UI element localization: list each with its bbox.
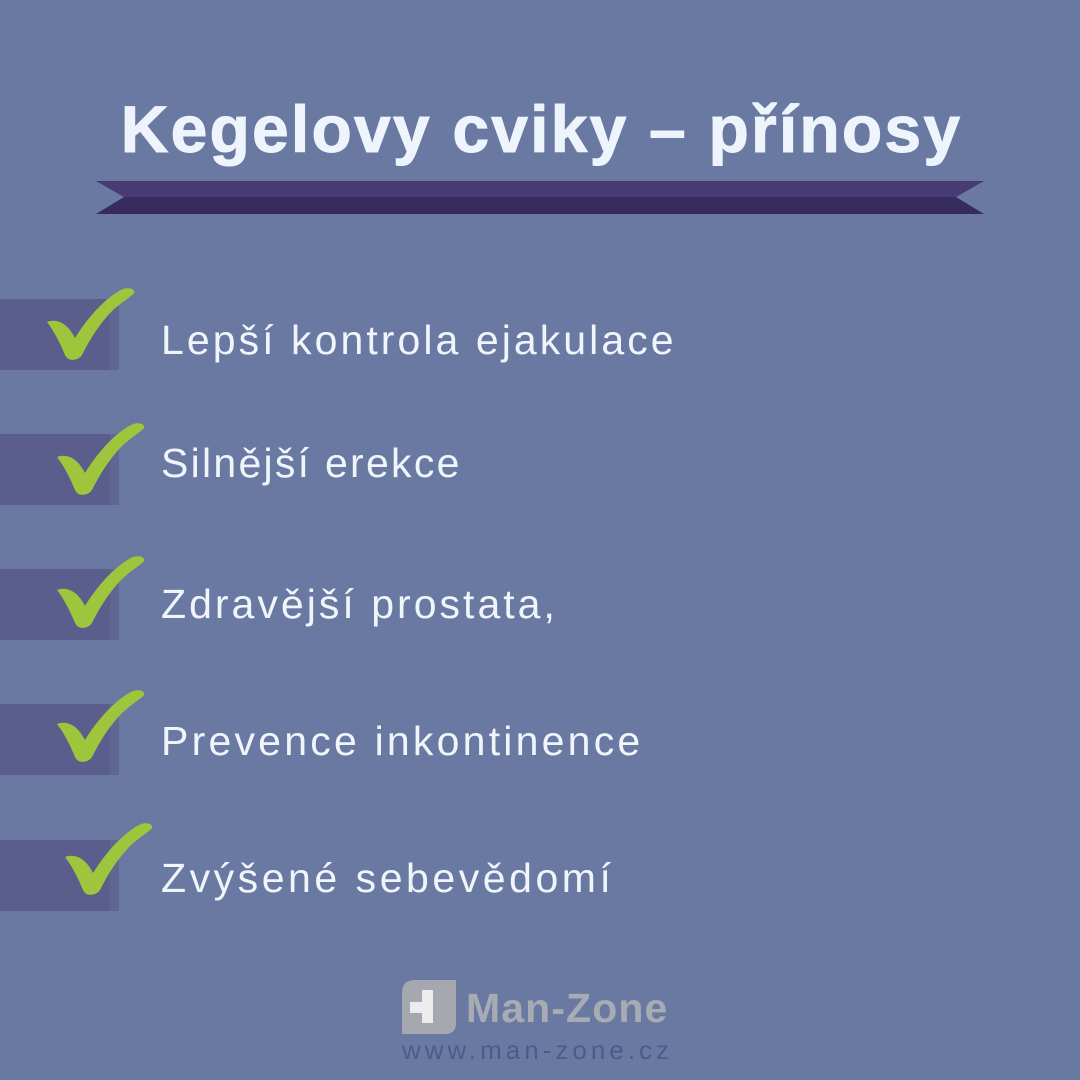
text 4: Prevence inkontinence [161,718,643,764]
check icon 3 [57,556,144,628]
check box 1 [0,299,119,370]
text 2: Silnější erekce [161,440,462,486]
text 1: Lepší kontrola ejakulace [161,317,677,363]
check box 3 [0,569,119,640]
title: Kegelovy cviky – přínosy [121,92,962,166]
logo wordmark: Man-Zone [466,985,668,1031]
check box 4 [0,704,119,775]
check box 2 [0,434,119,505]
title ribbon [96,181,984,214]
text 3: Zdravější prostata, [161,581,558,627]
logo icon [402,980,456,1034]
text 5: Zvýšené sebevědomí [161,855,614,901]
check icon 5 [65,823,152,895]
website url: www.man-zone.cz [402,1035,673,1065]
check icon 2 [57,423,144,495]
check icon 4 [57,690,144,762]
check icon 1 [47,288,134,360]
check box 5 [0,840,119,911]
